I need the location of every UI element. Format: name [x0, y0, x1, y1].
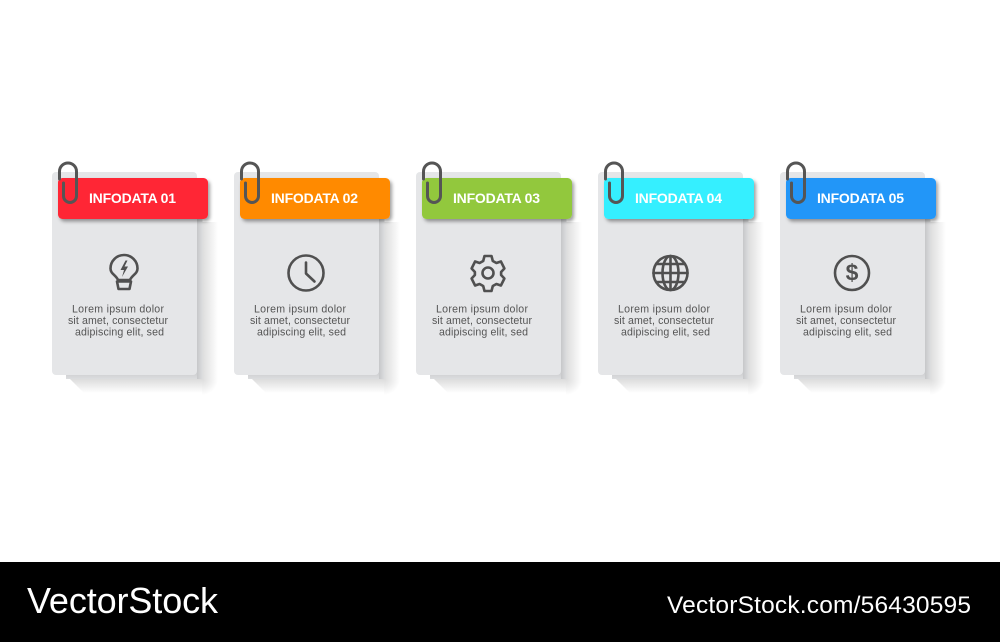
panel: card 02	[234, 163, 400, 395]
text block: adipiscing elit, sed	[439, 326, 528, 338]
text block: sit amet, consectetur	[614, 315, 714, 327]
heading tag: INFODATA 05	[786, 178, 936, 219]
text block	[796, 304, 896, 338]
heading tag: INFODATA 05: INFODATA 05	[817, 190, 904, 206]
panel: card 04	[598, 163, 764, 395]
text block: adipiscing elit, sed	[75, 326, 164, 338]
panel: card 01	[52, 163, 218, 395]
text block: Lorem ipsum dolor	[436, 304, 528, 316]
icon: clock	[288, 256, 324, 290]
panel: card 05	[780, 163, 946, 395]
text block: adipiscing elit, sed	[621, 326, 710, 338]
text block: sit amet, consectetur	[796, 315, 896, 327]
text block: sit amet, consectetur	[250, 315, 350, 327]
heading tag: INFODATA 03	[422, 178, 572, 219]
icon: paperclip	[242, 163, 259, 202]
heading tag: INFODATA 04	[604, 178, 754, 219]
text block: sit amet, consectetur	[68, 315, 168, 327]
icon: dollar coin	[835, 256, 869, 290]
text block: adipiscing elit, sed	[803, 326, 892, 338]
heading tag: INFODATA 02: INFODATA 02	[271, 190, 358, 206]
heading tag: INFODATA 01	[58, 178, 208, 219]
image url: VectorStock.com/56430595	[667, 592, 971, 619]
heading tag: INFODATA 02	[240, 178, 390, 219]
icon: paperclip	[60, 163, 76, 202]
icon: paperclip	[606, 163, 622, 202]
text block: adipiscing elit, sed	[257, 326, 346, 338]
heading tag: INFODATA 03: INFODATA 03	[453, 190, 540, 206]
text block: Lorem ipsum dolor	[618, 304, 710, 316]
text block	[68, 304, 168, 338]
heading tag: INFODATA 04: INFODATA 04	[635, 190, 722, 206]
text block	[432, 304, 532, 338]
text block: Lorem ipsum dolor	[72, 304, 164, 316]
panel: card 03	[416, 163, 582, 395]
icon: gear	[472, 256, 504, 291]
icon: light bulb	[110, 255, 138, 289]
icon: globe	[654, 256, 688, 290]
text block	[250, 304, 350, 338]
icon: dollar coin: $	[846, 260, 859, 286]
footer bar	[0, 562, 1000, 642]
text block: Lorem ipsum dolor	[254, 304, 346, 316]
text block: sit amet, consectetur	[432, 315, 532, 327]
text block: Lorem ipsum dolor	[800, 304, 892, 316]
logo wordmark: VectorStock	[27, 580, 219, 621]
heading tag: INFODATA 01: INFODATA 01	[89, 190, 176, 206]
icon: paperclip	[424, 163, 440, 202]
text block	[614, 304, 714, 338]
icon: paperclip	[788, 163, 804, 202]
